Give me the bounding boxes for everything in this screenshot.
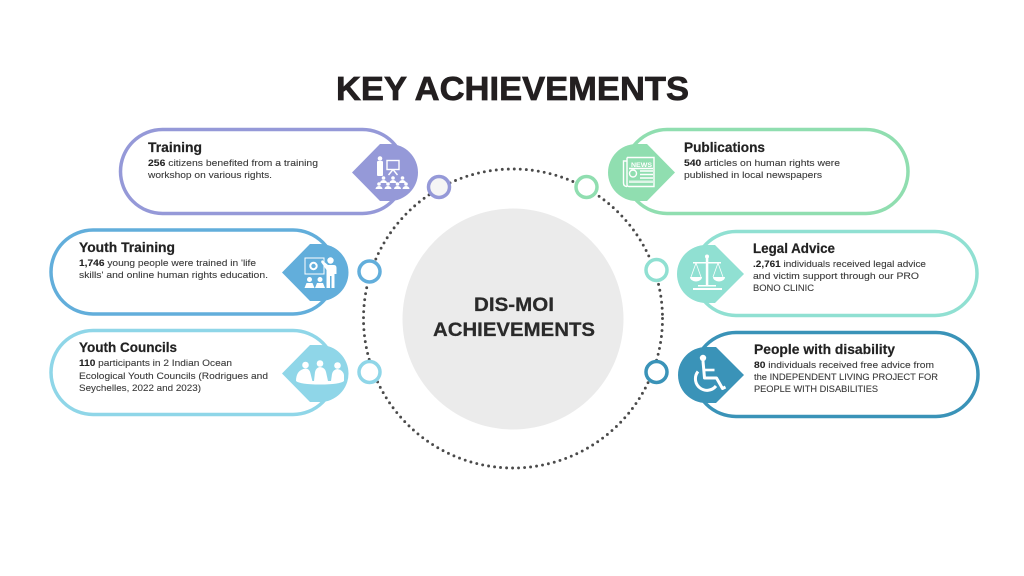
title: KEY ACHIEVEMENTS [336, 70, 689, 107]
central circle with label [402, 208, 624, 430]
heading: training: Training [148, 140, 202, 155]
text: youth training: skills' and online human rights education. [79, 270, 268, 281]
text: people with disability: 80 individuals received free advice from [754, 360, 934, 371]
heading: youth councils: Youth Councils [79, 340, 177, 355]
text: youth councils: Ecological Youth Councils (Rodrigues and [79, 371, 268, 382]
text: youth councils: 110 participants in 2 Indian Ocean [79, 358, 232, 369]
icon: teacher with board [282, 244, 348, 301]
central dotted ring [364, 169, 662, 468]
text: youth training [79, 258, 268, 281]
heading: youth training: Youth Training [79, 240, 175, 255]
connector node: training [428, 176, 450, 198]
icon: newspaper: NEWS [631, 162, 653, 169]
text: legal advice: and victim support through our PRO [753, 271, 919, 282]
text: training: 256 citizens benefited from a training [148, 158, 318, 169]
text: people with disability: the INDEPENDENT LIVING PROJECT FOR [754, 372, 938, 383]
central circle with label: ACHIEVEMENTS [433, 320, 595, 341]
panel: training [120, 130, 418, 214]
text: youth councils: Seychelles, 2022 and 2023) [79, 383, 201, 394]
panel: youth training [51, 230, 348, 314]
icon: scales of justice [677, 245, 744, 303]
text: training [147, 158, 318, 181]
connector node: people with disability [646, 362, 667, 382]
connector node: legal advice [646, 260, 667, 280]
connector node: youth councils [359, 362, 380, 382]
text: training: workshop on various rights. [147, 170, 272, 181]
connector node: youth training [359, 261, 380, 282]
panel: publications [608, 130, 908, 214]
heading: people with disability: People with disability [754, 342, 895, 357]
text: legal advice: .2,761 individuals received legal advice [753, 259, 926, 270]
text: legal advice: BONO CLINIC [753, 283, 814, 294]
icon: newspaper [608, 144, 675, 201]
text: youth councils [79, 358, 268, 394]
heading: publications: Publications [684, 140, 765, 155]
text: youth training: 1,746 young people were trained in 'life [79, 258, 256, 269]
text: people with disability: PEOPLE WITH DISABILITIES [754, 384, 878, 395]
text: people with disability [754, 360, 938, 395]
panel: legal advice [677, 232, 977, 316]
text: legal advice [753, 259, 926, 294]
connector node: publications [576, 176, 597, 198]
icon: meeting group [282, 345, 348, 402]
heading: legal advice: Legal Advice [753, 241, 835, 256]
panel: people with disability [678, 332, 978, 416]
text: publications: published in local newspapers [684, 170, 822, 181]
text: publications [684, 158, 840, 181]
panel: youth councils [51, 330, 348, 414]
central circle with label: DIS-MOI [474, 295, 554, 316]
text: publications: 540 articles on human rights were [684, 158, 840, 169]
icon: presenter and audience [352, 144, 418, 201]
icon: wheelchair [678, 347, 744, 403]
